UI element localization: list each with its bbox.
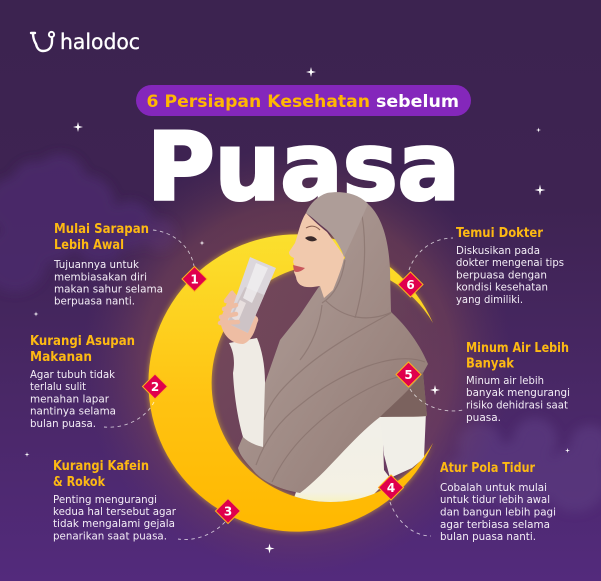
- tip 2: Kurangi Asupan Makanan: [30, 334, 135, 430]
- tip 6: Temui Dokter: [456, 226, 564, 306]
- marker 4: 4: [387, 481, 395, 495]
- tip 3: Kurangi Kafein & Rokok: [53, 459, 176, 542]
- tip 5: Minum Air Lebih Banyak: risiko dehidrasi saat: [466, 398, 569, 412]
- tip 4: Atur Pola Tidur: untuk tidur lebih awal: [440, 493, 550, 506]
- tip 1: Mulai Sarapan: makan sahur selama: [54, 282, 163, 296]
- tip 2: Kurangi Asupan Makanan: Agar tubuh tidak: [30, 368, 116, 381]
- tip 5: Minum Air Lebih Banyak: Banyak: [466, 356, 514, 372]
- tip 3: Kurangi Kafein & Rokok: Kurangi Kafein: [53, 459, 149, 474]
- glass of water: [227, 257, 276, 333]
- stars: [24, 67, 570, 554]
- hijab band: [306, 192, 368, 257]
- tip 3: Kurangi Kafein & Rokok: penarikan saat puasa.: [53, 530, 167, 542]
- clouds bottom right: [444, 418, 601, 512]
- tip 1: Mulai Sarapan: membiasakan diri: [54, 270, 147, 284]
- marker 5: [396, 362, 421, 387]
- marker 5: 5: [404, 368, 413, 382]
- tip 2: Kurangi Asupan Makanan: nantinya selama: [30, 404, 116, 418]
- tip 5: Minum Air Lebih Banyak: puasa.: [466, 411, 501, 424]
- torso: [294, 416, 426, 502]
- marker 1: 1: [190, 272, 199, 286]
- tip 6: Temui Dokter: dokter mengenai tips: [456, 256, 564, 269]
- marker 2: 2: [151, 380, 159, 394]
- logo: halodoc: halodoc: [60, 30, 140, 54]
- title: Puasa: Puasa: [147, 113, 460, 222]
- tip 1: Mulai Sarapan: Tujuannya untuk: [53, 258, 140, 271]
- tip 4: Atur Pola Tidur: agar terbiasa selama: [440, 518, 550, 531]
- icon: stethoscope: [31, 32, 54, 51]
- hijab drape: [238, 193, 428, 493]
- tip 2: Kurangi Asupan Makanan: terlalu sulit: [30, 380, 87, 393]
- tip 4: Atur Pola Tidur: Cobalah untuk mulai: [440, 481, 547, 494]
- tip 2: Kurangi Asupan Makanan: bulan puasa.: [30, 417, 96, 430]
- tip 1: Mulai Sarapan: berpuasa nanti.: [54, 294, 135, 308]
- tip 5: Minum Air Lebih Banyak: [466, 341, 570, 424]
- marker 4: [378, 475, 404, 500]
- tip 5: Minum Air Lebih Banyak: Minum air lebih: [466, 374, 544, 387]
- tip 4: Atur Pola Tidur: dan bangun lebih pagi: [440, 506, 556, 518]
- face: [289, 213, 344, 298]
- tip 2: Kurangi Asupan Makanan: menahan lapar: [30, 392, 109, 406]
- tip 3: Kurangi Kafein & Rokok: kedua hal tersebut agar: [53, 505, 176, 518]
- crescent moon: [148, 234, 450, 532]
- lips: [293, 265, 305, 272]
- eye: [305, 236, 317, 241]
- marker 2: [142, 374, 168, 399]
- tip 2: Kurangi Asupan Makanan: Kurangi Asupan: [30, 334, 135, 349]
- sleeve: [229, 338, 265, 447]
- tip 6: Temui Dokter: kondisi kesehatan: [456, 280, 548, 294]
- tip 4: Atur Pola Tidur: bulan puasa nanti.: [440, 530, 536, 543]
- tip 3: Kurangi Kafein & Rokok: & Rokok: [53, 475, 105, 490]
- tip 3: Kurangi Kafein & Rokok: tidak mengalami gejala: [53, 517, 175, 530]
- marker 6: [398, 272, 423, 297]
- marker 1: [182, 266, 207, 292]
- clouds top left: [0, 154, 176, 292]
- tip 1: Mulai Sarapan: Lebih Awal: [54, 238, 124, 253]
- tip 1: Mulai Sarapan: Mulai Sarapan: [54, 222, 149, 237]
- tip 6: Temui Dokter: Diskusikan pada: [456, 244, 540, 257]
- title pill: [136, 85, 471, 116]
- tip 3: Kurangi Kafein & Rokok: Penting mengurangi: [53, 493, 157, 506]
- tip 5: Minum Air Lebih Banyak: Minum Air Lebih: [466, 341, 569, 356]
- tip 4: Atur Pola Tidur: Atur Pola Tidur: [440, 461, 535, 476]
- tip 6: Temui Dokter: berpuasa dengan: [456, 268, 547, 282]
- woman with hijab drinking water: [220, 192, 428, 512]
- marker 3: 3: [224, 504, 232, 518]
- dashed connector lines: [104, 230, 463, 540]
- tip 4: Atur Pola Tidur: [440, 461, 556, 543]
- moon glow: [82, 145, 512, 575]
- tip 2: Kurangi Asupan Makanan: Makanan: [30, 350, 92, 365]
- tip 1: Mulai Sarapan: [53, 222, 163, 308]
- tip 6: Temui Dokter: Temui Dokter: [456, 226, 544, 241]
- marker 3: [216, 498, 240, 524]
- title pill: 6 Persiapan Kesehatan: [146, 92, 370, 112]
- fingers: [220, 293, 256, 334]
- tip 5: Minum Air Lebih Banyak: banyak mengurangi: [466, 386, 570, 399]
- title pill: sebelum: [376, 92, 459, 112]
- tip 6: Temui Dokter: yang dimiliki.: [456, 293, 523, 306]
- hijab folds: [256, 205, 425, 482]
- marker 6: 6: [406, 278, 415, 292]
- eyebrow: [306, 226, 320, 230]
- hand back: [220, 290, 258, 344]
